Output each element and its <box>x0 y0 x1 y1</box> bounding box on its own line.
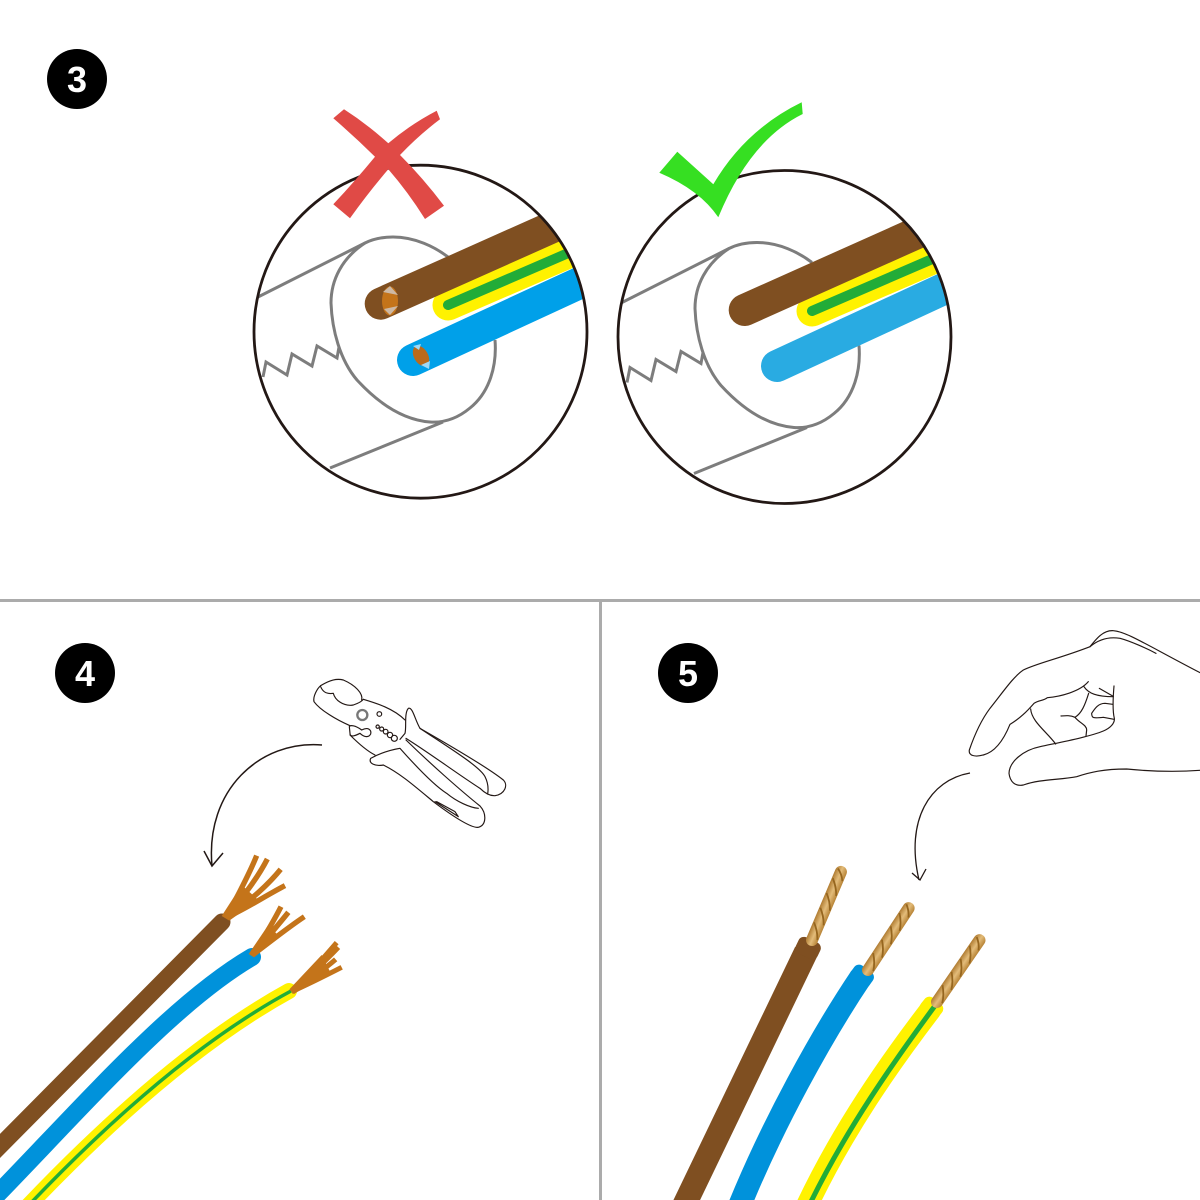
magnifier ring <box>618 170 951 504</box>
arrow: pliers to wires <box>204 745 322 866</box>
twisted copper <box>929 932 988 1010</box>
panel: wrong cut cable <box>252 164 588 500</box>
twisted copper <box>804 864 849 948</box>
magnifier ring <box>254 165 587 498</box>
wires <box>728 222 946 382</box>
brown wire <box>0 856 285 1158</box>
badge: step 4 <box>55 643 115 703</box>
badge: step 3: 3 <box>67 59 87 100</box>
wires <box>364 216 582 376</box>
badge: step 5: 5 <box>678 653 698 694</box>
wires: stripped and frayed <box>0 856 342 1200</box>
icon: wire stripper pliers <box>314 679 506 827</box>
cable outline <box>258 237 495 468</box>
icon: red cross <box>333 109 444 219</box>
panel: correct cut cable <box>616 169 952 505</box>
brown wire cut end <box>382 286 398 316</box>
badge: step 4: 4 <box>75 653 95 694</box>
brown wire <box>681 864 849 1200</box>
blue wire cut end <box>409 343 433 369</box>
blue wire <box>0 907 304 1200</box>
twisted copper <box>860 900 917 978</box>
wires: stripped and twisted <box>681 864 988 1200</box>
arrow: hand to wires <box>912 773 970 880</box>
blue wire <box>737 900 917 1200</box>
icon: green check <box>659 102 803 217</box>
icon: hand twisting <box>969 631 1200 785</box>
badge: step 5 <box>658 643 718 703</box>
earth wire <box>28 943 342 1200</box>
earth wire <box>804 932 988 1200</box>
badge: step 3 <box>47 49 107 109</box>
divider: horizontal <box>0 599 1200 602</box>
divider: vertical <box>599 600 602 1200</box>
cable outline <box>622 242 859 474</box>
